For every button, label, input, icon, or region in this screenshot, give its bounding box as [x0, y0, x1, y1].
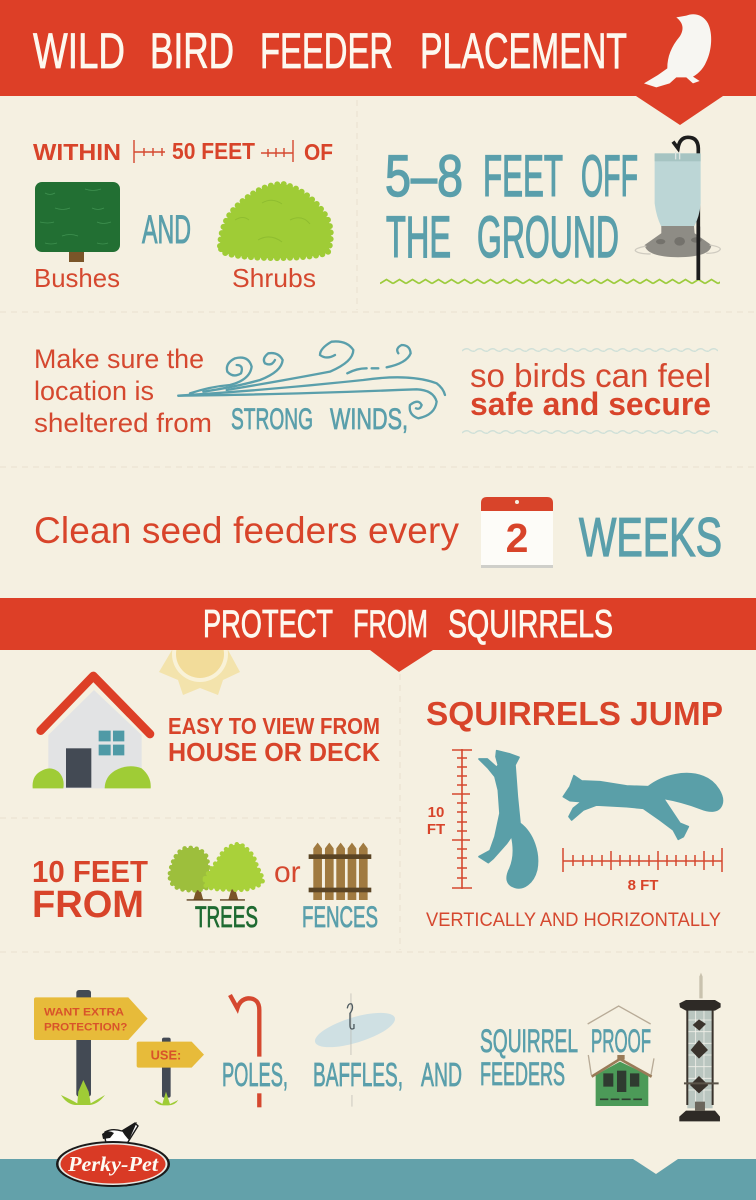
callout: safe and secure: safe and secure	[470, 386, 711, 422]
icon: sun	[159, 650, 240, 695]
icon: wind swirls	[178, 341, 445, 418]
icon: signposts: PROTECTION?	[44, 1021, 127, 1033]
text: sheltered location	[34, 344, 212, 438]
heading: within 50 feet of	[33, 138, 333, 165]
callout: safe and secure	[462, 347, 718, 435]
text: vertically and horizontally: VERTICALLY AND HORIZONTALLY	[426, 910, 721, 931]
label: squirrel proof feeders: SQUIRREL	[480, 1023, 578, 1059]
logo: perky-pet	[56, 1122, 170, 1187]
icon: squirrel vertical	[479, 751, 538, 888]
heading: 5-8 feet off the ground: 5–8	[385, 144, 463, 209]
label: strong winds: WINDS,	[330, 403, 408, 436]
icon: hummingbird feeder on pole	[635, 137, 720, 280]
icon: calendar	[481, 497, 553, 568]
label: squirrel proof feeders	[480, 1023, 651, 1092]
icon: pole	[230, 995, 259, 1107]
heading: within 50 feet of: OF	[304, 139, 333, 165]
title: WILD	[33, 23, 125, 79]
icon: house	[33, 676, 151, 788]
heading: 5-8 feet off the ground	[385, 144, 638, 270]
icon: green house feeder	[588, 1006, 654, 1106]
label: shrubs: Shrubs	[232, 263, 316, 293]
icon: trees	[170, 844, 263, 900]
icon: calendar: 2	[506, 515, 528, 561]
callout: safe and secure: so birds can feel	[470, 357, 711, 394]
label: baffles and: AND	[421, 1056, 462, 1093]
header banner	[0, 0, 756, 125]
scale: eight feet horizontal: 8 FT	[628, 877, 658, 894]
scale: ten feet vertical	[427, 749, 472, 889]
heading: SQUIRRELS	[448, 603, 613, 646]
title: BIRD	[150, 23, 234, 79]
text: easy to view: EASY TO VIEW FROM	[168, 713, 380, 739]
icon: signposts	[34, 990, 204, 1105]
scale: ten feet vertical: FT	[427, 821, 445, 838]
icon: signposts: USE:	[151, 1047, 181, 1062]
text: 10 feet from: FROM	[32, 884, 144, 926]
icon: tube feeder	[679, 973, 721, 1121]
section banner: protect from squirrels	[0, 598, 756, 672]
label: and: AND	[142, 208, 191, 252]
heading: FROM	[353, 603, 428, 646]
text: easy to view: HOUSE OR DECK	[168, 737, 380, 767]
icon: bush	[35, 182, 120, 262]
heading: within 50 feet of: 50 FEET	[172, 138, 255, 164]
text: 10 feet from: 10 FEET	[32, 854, 148, 889]
text: sheltered location: Make sure the	[34, 344, 204, 374]
heading: squirrels jump: SQUIRRELS JUMP	[426, 695, 723, 732]
label: poles: POLES,	[222, 1056, 288, 1093]
text: or: or	[274, 856, 301, 889]
scale: eight feet horizontal	[563, 848, 722, 894]
title: PLACEMENT	[420, 23, 627, 79]
icon: squirrel horizontal	[563, 774, 722, 839]
text: clean seed feeders: Clean seed feeders every	[34, 510, 460, 551]
label: squirrel proof feeders: PROOF	[591, 1023, 651, 1059]
label: bushes: Bushes	[34, 263, 120, 293]
title: FEEDER	[260, 23, 393, 79]
footer band	[0, 1159, 756, 1200]
text: easy to view	[168, 713, 380, 767]
heading: within 50 feet of: WITHIN	[33, 139, 121, 165]
label: baffles and: BAFFLES,	[313, 1056, 403, 1093]
icon: baffle	[311, 993, 399, 1107]
heading	[203, 603, 613, 646]
icon: signposts: WANT EXTRA	[44, 1007, 124, 1019]
label: fences: FENCES	[302, 901, 378, 934]
text: sheltered location: location is	[34, 376, 154, 406]
heading: 5-8 feet off the ground: THE	[386, 205, 451, 270]
icon: white bird	[644, 14, 711, 87]
icon: fence	[309, 843, 371, 900]
icon: grass line	[380, 278, 720, 285]
label: trees: TREES	[195, 901, 258, 934]
icon: logo bird	[102, 1122, 138, 1152]
heading: PROTECT	[203, 603, 333, 646]
logo: perky-pet: Perky-Pet	[67, 1152, 159, 1176]
label: strong winds: STRONG	[231, 403, 313, 436]
text: OFF	[581, 144, 638, 209]
scale: ten feet vertical: 10	[428, 804, 444, 821]
icon: shrub	[220, 184, 331, 258]
text: 10 feet from	[32, 854, 148, 926]
panel: within 50 feet	[33, 138, 333, 293]
title	[33, 23, 627, 79]
heading: 5-8 feet off the ground: FEET	[483, 144, 563, 209]
text: sheltered location: sheltered from	[34, 408, 212, 438]
label: squirrel proof feeders: FEEDERS	[480, 1056, 565, 1092]
heading: 5-8 feet off the ground: GROUND	[477, 205, 619, 270]
